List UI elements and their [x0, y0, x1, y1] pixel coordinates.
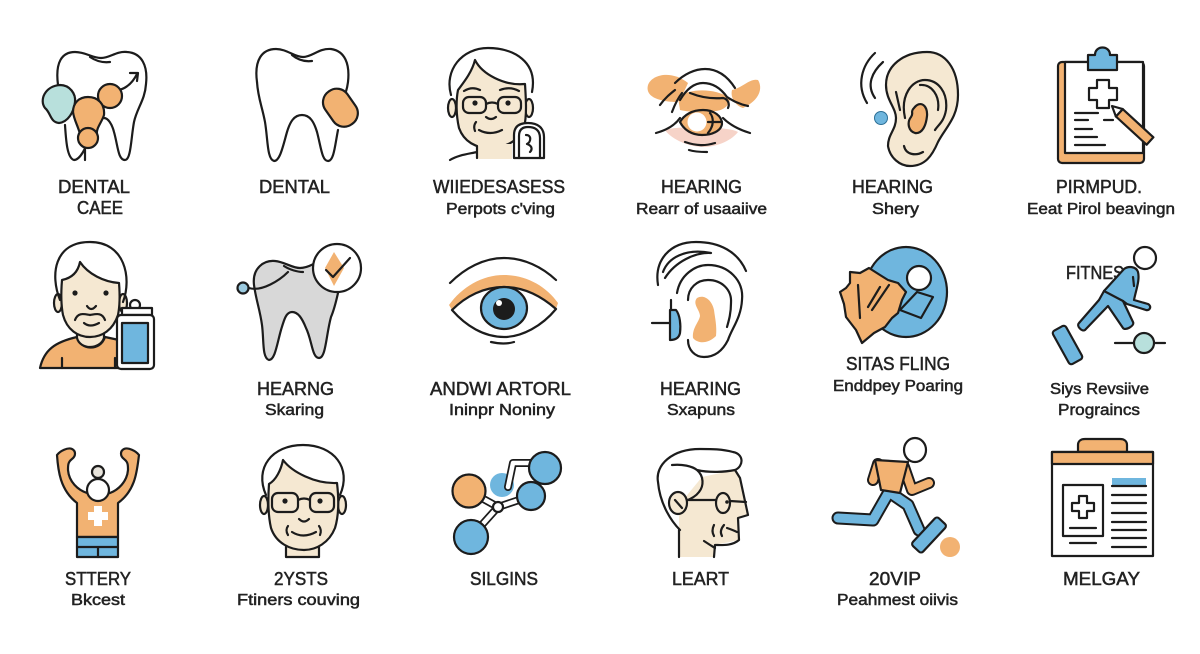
panel: silgins: [452, 452, 561, 589]
label: hearing usage: Rearr of usaaiive: [636, 201, 767, 218]
label: dental care: DENTAL: [58, 177, 130, 197]
icon: elder face with glasses: [260, 445, 346, 557]
label: sttery bkcest: STTERY: [65, 569, 131, 589]
label: dental care: [58, 177, 130, 218]
label: 2ysts: 2YSTS: [274, 569, 328, 589]
label: 2ysts: [237, 569, 360, 609]
icon: elder with bottle: [40, 242, 154, 369]
label: silgins: SILGINS: [470, 569, 538, 589]
label: leart: LEART: [672, 569, 729, 589]
icon: elder with glasses and hand: [448, 48, 544, 160]
label: fitness: FITNES: [1066, 263, 1124, 283]
label: 2ysts: Ftiners couving: [237, 592, 360, 609]
icon: molecule: [452, 452, 561, 554]
panel: hearing sxapuns: [652, 242, 746, 419]
icon: running figure: [838, 438, 960, 557]
label: revsiive programs: [1050, 381, 1149, 419]
label: hearng skaring: [257, 379, 334, 419]
panel: 2ysts: [237, 445, 360, 609]
panel: andwi artorl: [430, 258, 571, 419]
label: hearing shery: [852, 177, 933, 218]
label: hearing shery: HEARING: [852, 177, 933, 197]
label: hearing sxapuns: HEARING: [660, 379, 741, 399]
icon: runner with slab: [1052, 247, 1165, 365]
icon: person with raised arms: [57, 448, 139, 557]
label: wiedesasess: [433, 177, 565, 218]
icon: tooth with capsule: [256, 49, 363, 161]
label: sttery bkcest: [65, 569, 131, 609]
label: hearing usage: HEARING: [661, 177, 742, 197]
label: revsiive programs: Siys Revsiive: [1050, 381, 1149, 398]
panel: dental: [256, 49, 363, 197]
icon: clipboard with pencil: [1058, 48, 1153, 163]
label: wiedesasess: WIIEDESASESS: [433, 177, 565, 197]
icon: elder profile: [658, 449, 748, 557]
panel: fitness runner: [1050, 247, 1165, 419]
label: melgay: MELGAY: [1063, 569, 1140, 589]
label: 20vip: Peahmest oiivis: [837, 592, 958, 609]
icon: abstract eye: [648, 69, 760, 152]
label: hearng skaring: HEARNG: [257, 379, 334, 399]
panel: wiedesasess: [433, 48, 565, 218]
label: 20vip: [837, 569, 958, 609]
panel: leart: [658, 449, 748, 589]
label: sitas fling: [833, 354, 963, 395]
icon: leaf and blue disc: [840, 247, 947, 343]
icon: tooth with blobs: [43, 52, 146, 160]
panel: 20vip: [837, 438, 960, 609]
label: andwi artorl: [430, 379, 571, 419]
panel: hearing (eye): [636, 69, 767, 218]
label: hearng skaring: Skaring: [265, 402, 324, 419]
icon: medical report: [1052, 439, 1153, 556]
label: andwi artorl: Ininpr Noniny: [449, 402, 555, 419]
label: wiedesasess: Perpots c'ving: [446, 201, 555, 218]
icon: ear with sound waves: [861, 52, 958, 166]
label: pirmpud: [1027, 177, 1175, 218]
panel: hearing (ear): [852, 52, 958, 218]
label: hearing sxapuns: [660, 379, 741, 419]
panel: hearing skaring: [238, 244, 361, 419]
panel: melgay: [1052, 439, 1153, 589]
icon: grey tooth with check: [238, 244, 361, 360]
label: revsiive programs: Prograincs: [1058, 402, 1140, 419]
label: dental: DENTAL: [259, 177, 330, 197]
label: 20vip: 20VIP: [869, 569, 921, 589]
label: sitas fling: SITAS FLING: [846, 354, 950, 374]
panel: sitas fling: [833, 247, 963, 395]
label: andwi artorl: ANDWI ARTORL: [430, 379, 571, 399]
label: hearing shery: Shery: [872, 201, 919, 218]
panel: pirmpud clipboard: [1027, 48, 1175, 218]
icon: ear with device: [652, 242, 746, 357]
label: sttery bkcest: Bkcest: [71, 592, 126, 609]
label: pirmpud: PIRMPUD.: [1056, 177, 1142, 197]
panel: sttery: [57, 448, 139, 609]
panel: dental care: [43, 52, 146, 218]
label: dental care: CAEE: [77, 198, 123, 218]
label: hearing usage: [636, 177, 767, 218]
label: sitas fling: Enddpey Poaring: [833, 378, 963, 395]
icon: blue eye: [449, 258, 558, 344]
label: pirmpud: Eeat Pirol beavingn: [1027, 201, 1175, 218]
label: hearing sxapuns: Sxapuns: [667, 402, 735, 419]
